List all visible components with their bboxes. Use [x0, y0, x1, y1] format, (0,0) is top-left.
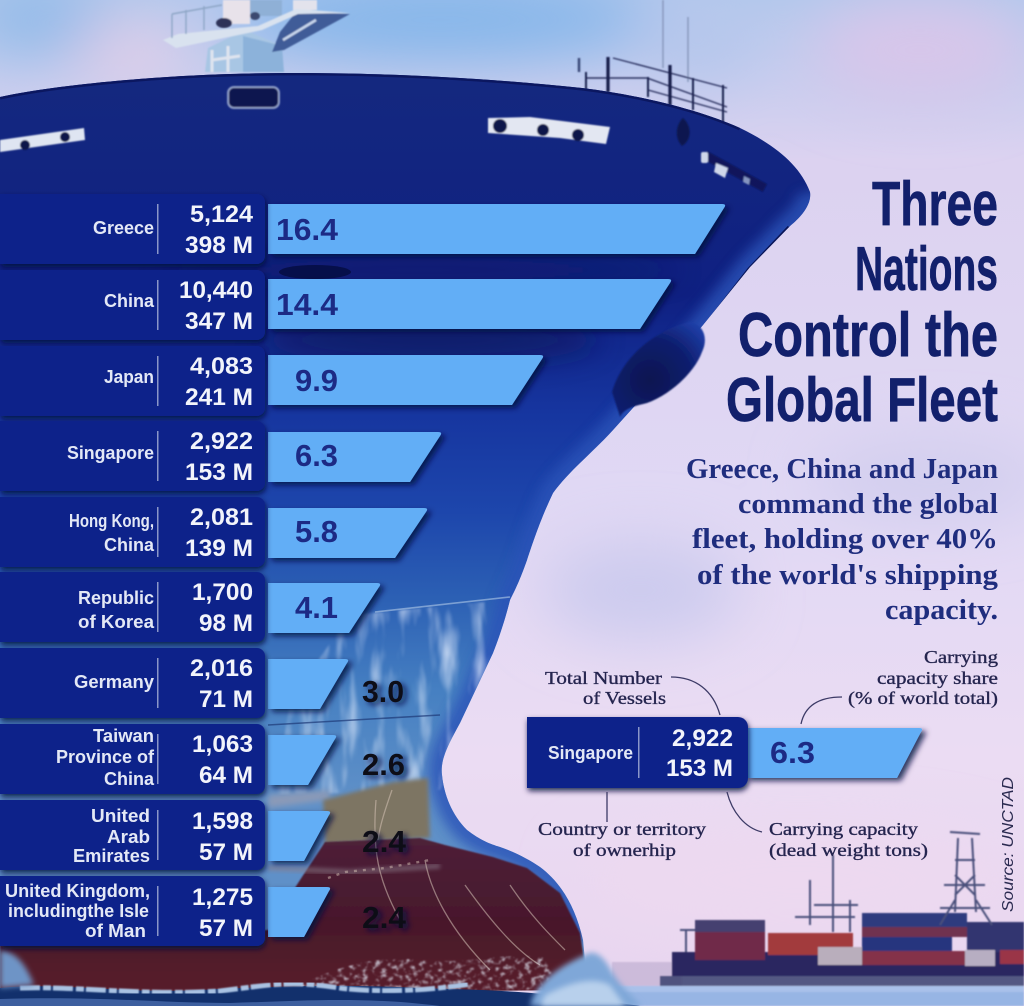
panel: United Arab Emirates label: 1,598	[192, 808, 253, 835]
row: United Kingdom, including the Isle of Man	[0, 876, 407, 946]
background: distant container ship and port	[612, 832, 1024, 1006]
row: United Arab Emirates	[0, 800, 407, 870]
legend bar sample	[745, 728, 922, 778]
legend panel sample	[527, 717, 748, 788]
panel: United Kingdom label	[0, 876, 265, 946]
panel: Greece label: 398 M	[185, 232, 253, 259]
bar: 6.3: 6.3	[295, 438, 338, 473]
panel: Hong Kong, China label: 139 M	[185, 535, 253, 562]
annotation: carrying capacity dead weight tons	[727, 792, 928, 861]
panel: Republic of Korea label: Republic	[78, 588, 154, 608]
source note: Source: UNCTAD	[1000, 777, 1017, 912]
annotation: carrying capacity share	[801, 647, 998, 724]
annotation: country or territory of ownership: Country or territory	[538, 819, 706, 839]
panel: Germany label: 71 M	[199, 686, 253, 713]
panel: United Arab Emirates label: Emirates	[73, 846, 150, 866]
weathered hull streaks	[275, 600, 505, 795]
row: Japan	[0, 346, 543, 416]
panel: United Kingdom label: 1,275	[192, 884, 253, 911]
row: Republic of Korea	[0, 572, 380, 642]
panel: Greece label: 5,124	[190, 201, 254, 228]
bar: 2.4: 2.4	[362, 824, 407, 859]
ship hull	[0, 73, 810, 991]
panel: United Kingdom label: of Man	[85, 921, 146, 941]
panel: United Arab Emirates label: Arab	[107, 827, 150, 847]
legend: how to read the chart	[527, 647, 998, 861]
panel: United Arab Emirates label: 57 M	[199, 839, 253, 866]
annotation: total number of vessels: Total Number	[545, 668, 662, 688]
hull shading	[238, 259, 638, 368]
subtitle text block: capacity.	[885, 595, 998, 626]
legend panel sample: 2,922	[672, 725, 733, 752]
ship railing and antennas	[579, 0, 727, 122]
panel: United Arab Emirates label	[0, 800, 265, 870]
annotation: carrying capacity share: capacity share	[877, 668, 998, 688]
row: Greece	[0, 194, 725, 264]
bar: 14.4: 14.4	[276, 287, 339, 322]
panel: Hong Kong, China label: Hong Kong,	[69, 511, 154, 531]
panel: China label	[0, 270, 265, 340]
panel: United Kingdom label: includingthe Isle	[8, 901, 149, 921]
panel: Taiwan Province of China label: 64 M	[199, 762, 253, 789]
panel: Japan label: Japan	[104, 367, 154, 387]
panel: Japan label: 4,083	[190, 353, 253, 380]
annotation: total number of vessels	[545, 668, 720, 715]
legend panel sample: 153 M	[666, 755, 733, 782]
bar: 9.9: 9.9	[295, 363, 338, 398]
panel: China label: China	[104, 291, 155, 311]
bar: 16.4: 16.4	[276, 212, 339, 247]
row: Singapore	[0, 421, 441, 491]
subtitle text block: of the world's shipping	[697, 560, 998, 591]
panel: Republic of Korea label: of Korea	[78, 612, 155, 632]
annotation: carrying capacity share: (% of world total)	[848, 688, 998, 709]
hull rim shadow	[0, 73, 740, 128]
panel: Taiwan Province of China label: Taiwan	[93, 726, 154, 746]
bar: 14.4	[268, 279, 671, 329]
bar: 5.8	[268, 508, 427, 558]
annotation: carrying capacity share: Carrying	[924, 647, 998, 667]
bar: 3.0: 3.0	[362, 674, 404, 709]
panel: United Kingdom label: 57 M	[199, 915, 253, 942]
panel: Taiwan Province of China label	[0, 724, 265, 794]
panel: Germany label: 2,016	[190, 655, 253, 682]
panel: Hong Kong, China label: 2,081	[190, 504, 253, 531]
panel: Republic of Korea label: 1,700	[192, 579, 253, 606]
title	[726, 170, 998, 435]
panel: Taiwan Province of China label: China	[104, 769, 155, 789]
legend bar sample: 6.3	[770, 735, 815, 770]
bar: 3.0	[268, 659, 404, 709]
tan primer patch	[323, 778, 430, 845]
panel: Greece label: Greece	[93, 218, 154, 238]
hull lower antifouling paint	[0, 838, 590, 1000]
panel: Republic of Korea label: 98 M	[199, 610, 253, 637]
panel: Greece label	[0, 194, 265, 264]
panel: Japan label: 241 M	[185, 384, 253, 411]
ship mast and platform	[163, 0, 350, 72]
bar: 2.6: 2.6	[362, 747, 405, 782]
panel: Singapore label: 153 M	[185, 459, 253, 486]
panel: China label: 10,440	[179, 277, 253, 304]
annotation: country or territory of ownership: of ownerhip	[573, 840, 676, 860]
sea foam and bow wave	[0, 950, 642, 1006]
subtitle text block: fleet, holding over 40%	[692, 524, 998, 555]
bar: 2.4	[268, 887, 407, 937]
bar: 2.4: 2.4	[362, 900, 407, 935]
panel: Taiwan Province of China label: Province of	[56, 747, 155, 767]
panel: Singapore label	[0, 421, 265, 491]
bar: 2.6	[268, 735, 405, 785]
row: Taiwan Province of China	[0, 724, 405, 794]
panel: Taiwan Province of China label: 1,063	[192, 731, 253, 758]
panel: Republic of Korea label	[0, 572, 265, 642]
bar: 9.9	[268, 355, 543, 405]
panel: Singapore label: Singapore	[67, 443, 154, 463]
subtitle text block: command the global	[738, 489, 998, 520]
annotation: carrying capacity dead weight tons: Carrying capacity	[769, 819, 918, 839]
panel: China label: 347 M	[185, 308, 253, 335]
row: China	[0, 270, 671, 340]
annotation: total number of vessels: of Vessels	[583, 688, 666, 708]
subtitle text block	[686, 454, 998, 626]
annotation: carrying capacity dead weight tons: (dead weight tons)	[769, 840, 928, 861]
panel: Hong Kong, China label	[0, 497, 265, 567]
bar: 5.8: 5.8	[295, 514, 338, 549]
panel: Hong Kong, China label: China	[104, 535, 155, 555]
bar: 4.1	[268, 583, 380, 633]
row: Germany	[0, 648, 404, 718]
bar: 2.4	[268, 811, 407, 861]
legend panel sample: Singapore	[548, 743, 633, 763]
panel: Japan label	[0, 346, 265, 416]
hull fittings: porthole and white markings	[0, 87, 765, 188]
subtitle text block: Greece, China and Japan	[686, 454, 998, 485]
panel: Germany label	[0, 648, 265, 718]
panel: United Kingdom label: United Kingdom,	[5, 881, 150, 901]
annotation: country or territory of ownership	[538, 792, 706, 860]
panel: Germany label: Germany	[74, 672, 154, 692]
hawse pipe bulge on bow	[612, 322, 705, 417]
bar: 4.1: 4.1	[295, 590, 338, 625]
bar: 16.4	[268, 204, 725, 254]
bar: 6.3	[268, 432, 441, 482]
panel: United Arab Emirates label: United	[91, 806, 150, 826]
panel: Singapore label: 2,922	[190, 428, 253, 455]
row: Hong Kong, China	[0, 497, 427, 567]
